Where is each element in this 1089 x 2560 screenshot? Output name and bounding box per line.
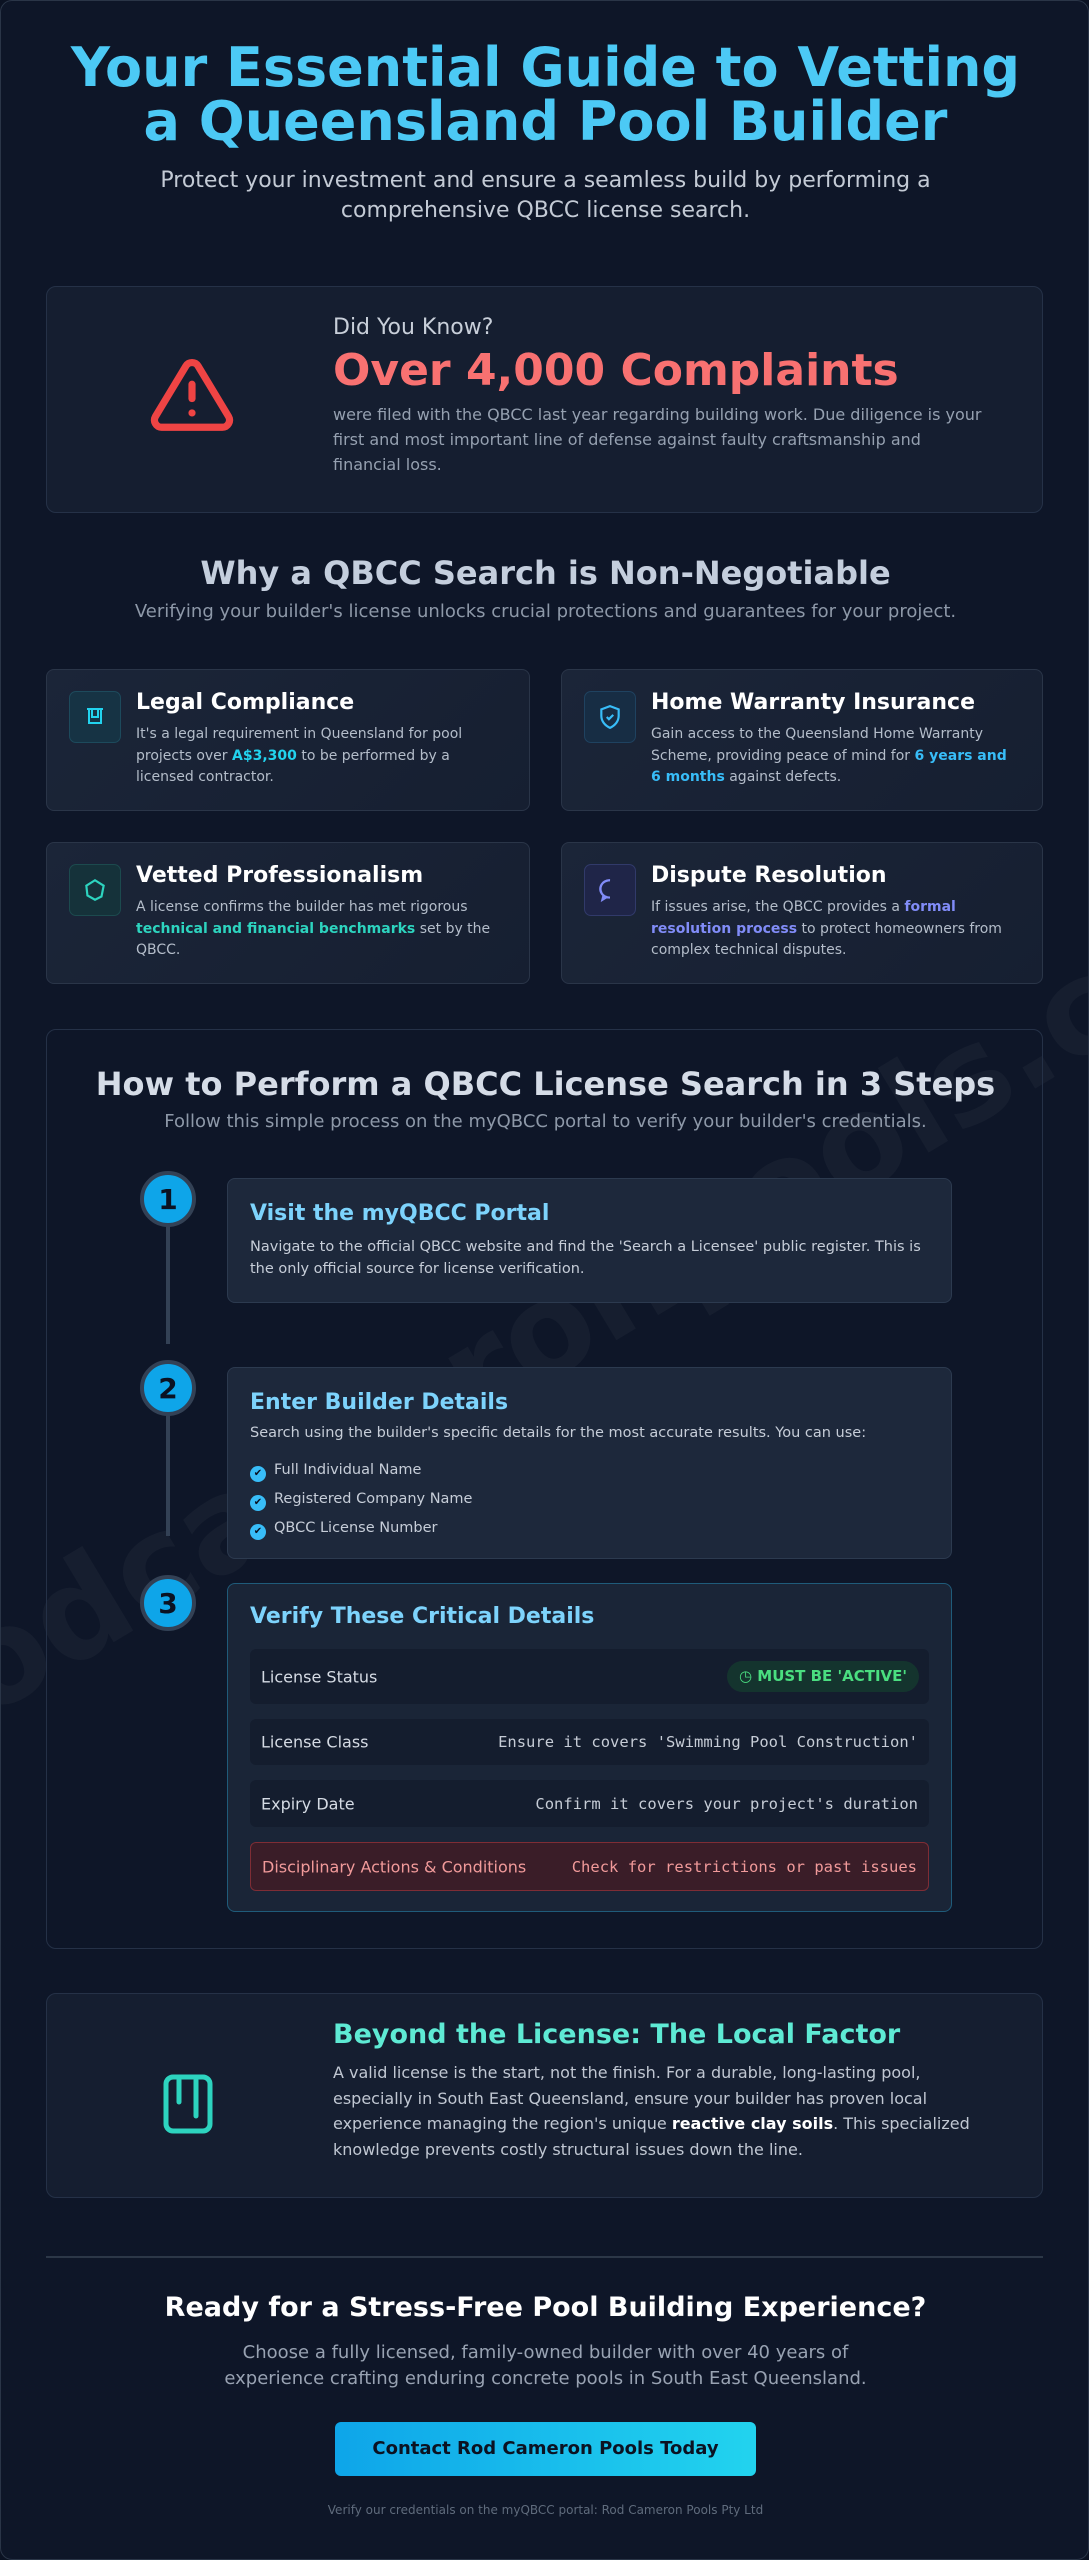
- row: expiry: Confirm it covers your project's duration: [535, 1794, 918, 1812]
- row: disciplinary: Disciplinary Actions & Conditions: [262, 1857, 526, 1876]
- footer note: Verify our credentials on the myQBCC portal: Rod Cameron Pools Pty Ltd: [328, 2503, 763, 2517]
- title: Your Essential Guide to Vetting: [71, 36, 1020, 99]
- badge: active: ◷ MUST BE 'ACTIVE': [739, 1667, 907, 1685]
- circle 1: [140, 1171, 196, 1227]
- checklist: QBCC License Number: [274, 1520, 438, 1536]
- checklist: ✔: [254, 1497, 262, 1508]
- heading: steps: How to Perform a QBCC License Search in 3 Steps: [96, 1065, 995, 1103]
- card: dispute resolution: If issues arise, the QBCC provides a formal resolution process to protect homeowners from complex technical disputes.: [651, 899, 1002, 958]
- card: legal compliance: It's a legal requirement in Queensland for pool projects over A$3,300 to be performed by a licensed contractor.: [136, 726, 462, 785]
- card: step 2: [227, 1367, 952, 1559]
- stat text: Over 4,000 Complaints: [333, 345, 899, 396]
- card: legal compliance: Legal Compliance: [136, 690, 354, 715]
- panel: did you know: [46, 286, 1043, 513]
- circle 2: [140, 1360, 196, 1416]
- text: local factor: [333, 2019, 970, 2158]
- checklist: [250, 1462, 472, 1540]
- stat text: were filed with the QBCC last year regarding building work. Due diligence is your first and most important line of defense against faulty craftsmanship and financial loss.: [333, 405, 981, 474]
- CTA text: Choose a fully licensed, family-owned builder with over 40 years of experience crafting enduring concrete pools in South East Queensland.: [224, 2342, 867, 2389]
- subtitle: Protect your investment and ensure a seamless build by performing a comprehensive QBCC license search.: [160, 168, 931, 223]
- row: disciplinary: Check for restrictions or past issues: [572, 1858, 917, 1876]
- circle 3: 3: [158, 1586, 178, 1620]
- stat text: Did You Know?: [333, 315, 493, 340]
- card: home warranty: Gain access to the Queensland Home Warranty Scheme, providing peace of mind for 6 years and 6 months against defects.: [651, 726, 1007, 785]
- card: step 1: Navigate to the official QBCC website and find the 'Search a Licensee' public register. This is the only official source for license verification.: [250, 1239, 921, 1276]
- row: license status: [250, 1649, 929, 1704]
- title: a Queensland Pool Builder: [144, 90, 947, 153]
- card: vetted professionalism: A license confirms the builder has met rigorous technical and financial benchmarks set by the QBCC.: [136, 899, 490, 958]
- CTA heading: Ready for a Stress-Free Pool Building Experience?: [165, 2292, 926, 2323]
- card: home warranty: [561, 669, 1043, 811]
- card: vetted professionalism: Vetted Professionalism: [136, 863, 423, 888]
- title: [70, 36, 1020, 153]
- button: [335, 2422, 756, 2476]
- subheading: steps: Follow this simple process on the myQBCC portal to verify your builder's credentials.: [164, 1111, 927, 1132]
- icon: chat: [584, 864, 636, 916]
- circle 3: [140, 1575, 196, 1631]
- step 2: [140, 1360, 952, 1559]
- card: step 1: [227, 1178, 952, 1303]
- icon: warning: [150, 359, 234, 431]
- row: license status: License Status: [261, 1667, 377, 1686]
- circle 1: 1: [158, 1182, 178, 1216]
- card: dispute resolution: Dispute Resolution: [651, 863, 887, 888]
- stat text: [333, 315, 982, 474]
- row: license class: Ensure it covers 'Swimming Pool Construction': [498, 1733, 918, 1751]
- checklist: Registered Company Name: [274, 1491, 472, 1507]
- checklist: ✔: [254, 1526, 262, 1537]
- step 3: [140, 1575, 952, 1912]
- row: expiry: [250, 1780, 929, 1827]
- icon: badge: [69, 864, 121, 916]
- row: license class: [250, 1719, 929, 1765]
- card: legal compliance: [46, 669, 530, 811]
- text: local factor: A valid license is the start, not the finish. For a durable, long-lasting pool, especially in South East Queensland, ensure your builder has proven local experience managing the region's unique reactive clay soils. This specialized knowledge prevents costly structural issues down the line.: [333, 2063, 970, 2158]
- button: Contact Rod Cameron Pools Today: [372, 2438, 719, 2459]
- card: home warranty: Home Warranty Insurance: [651, 690, 975, 715]
- icon: pool: [69, 691, 121, 743]
- checklist: ✔: [254, 1468, 262, 1479]
- card: vetted professionalism: [46, 842, 530, 984]
- panel: local factor: [46, 1993, 1043, 2198]
- step 1: [140, 1171, 952, 1303]
- circle 2: 2: [158, 1372, 178, 1404]
- connector lines: [166, 1226, 170, 1344]
- text: local factor: Beyond the License: The Local Factor: [333, 2019, 900, 2050]
- row: license class: License Class: [261, 1732, 368, 1752]
- icon: shield: [584, 691, 636, 743]
- card: dispute resolution: [561, 842, 1043, 984]
- card: step 3: [227, 1583, 952, 1912]
- subheading: why: Verifying your builder's license unlocks crucial protections and guarantees for your project.: [135, 601, 956, 622]
- checklist: Full Individual Name: [274, 1462, 421, 1478]
- panel: steps: [46, 1029, 1043, 1949]
- card: step 2: Search using the builder's specific details for the most accurate results. You can use:: [250, 1425, 866, 1441]
- card: step 1: Visit the myQBCC Portal: [250, 1201, 549, 1226]
- card: step 3: Verify These Critical Details: [250, 1604, 594, 1629]
- badge: active: [727, 1661, 919, 1692]
- row: disciplinary: [250, 1842, 929, 1891]
- icon: door: [164, 2074, 212, 2134]
- heading: why: Why a QBCC Search is Non-Negotiable: [200, 554, 891, 592]
- row: expiry: Expiry Date: [261, 1794, 355, 1813]
- card: step 2: Enter Builder Details: [250, 1390, 508, 1415]
